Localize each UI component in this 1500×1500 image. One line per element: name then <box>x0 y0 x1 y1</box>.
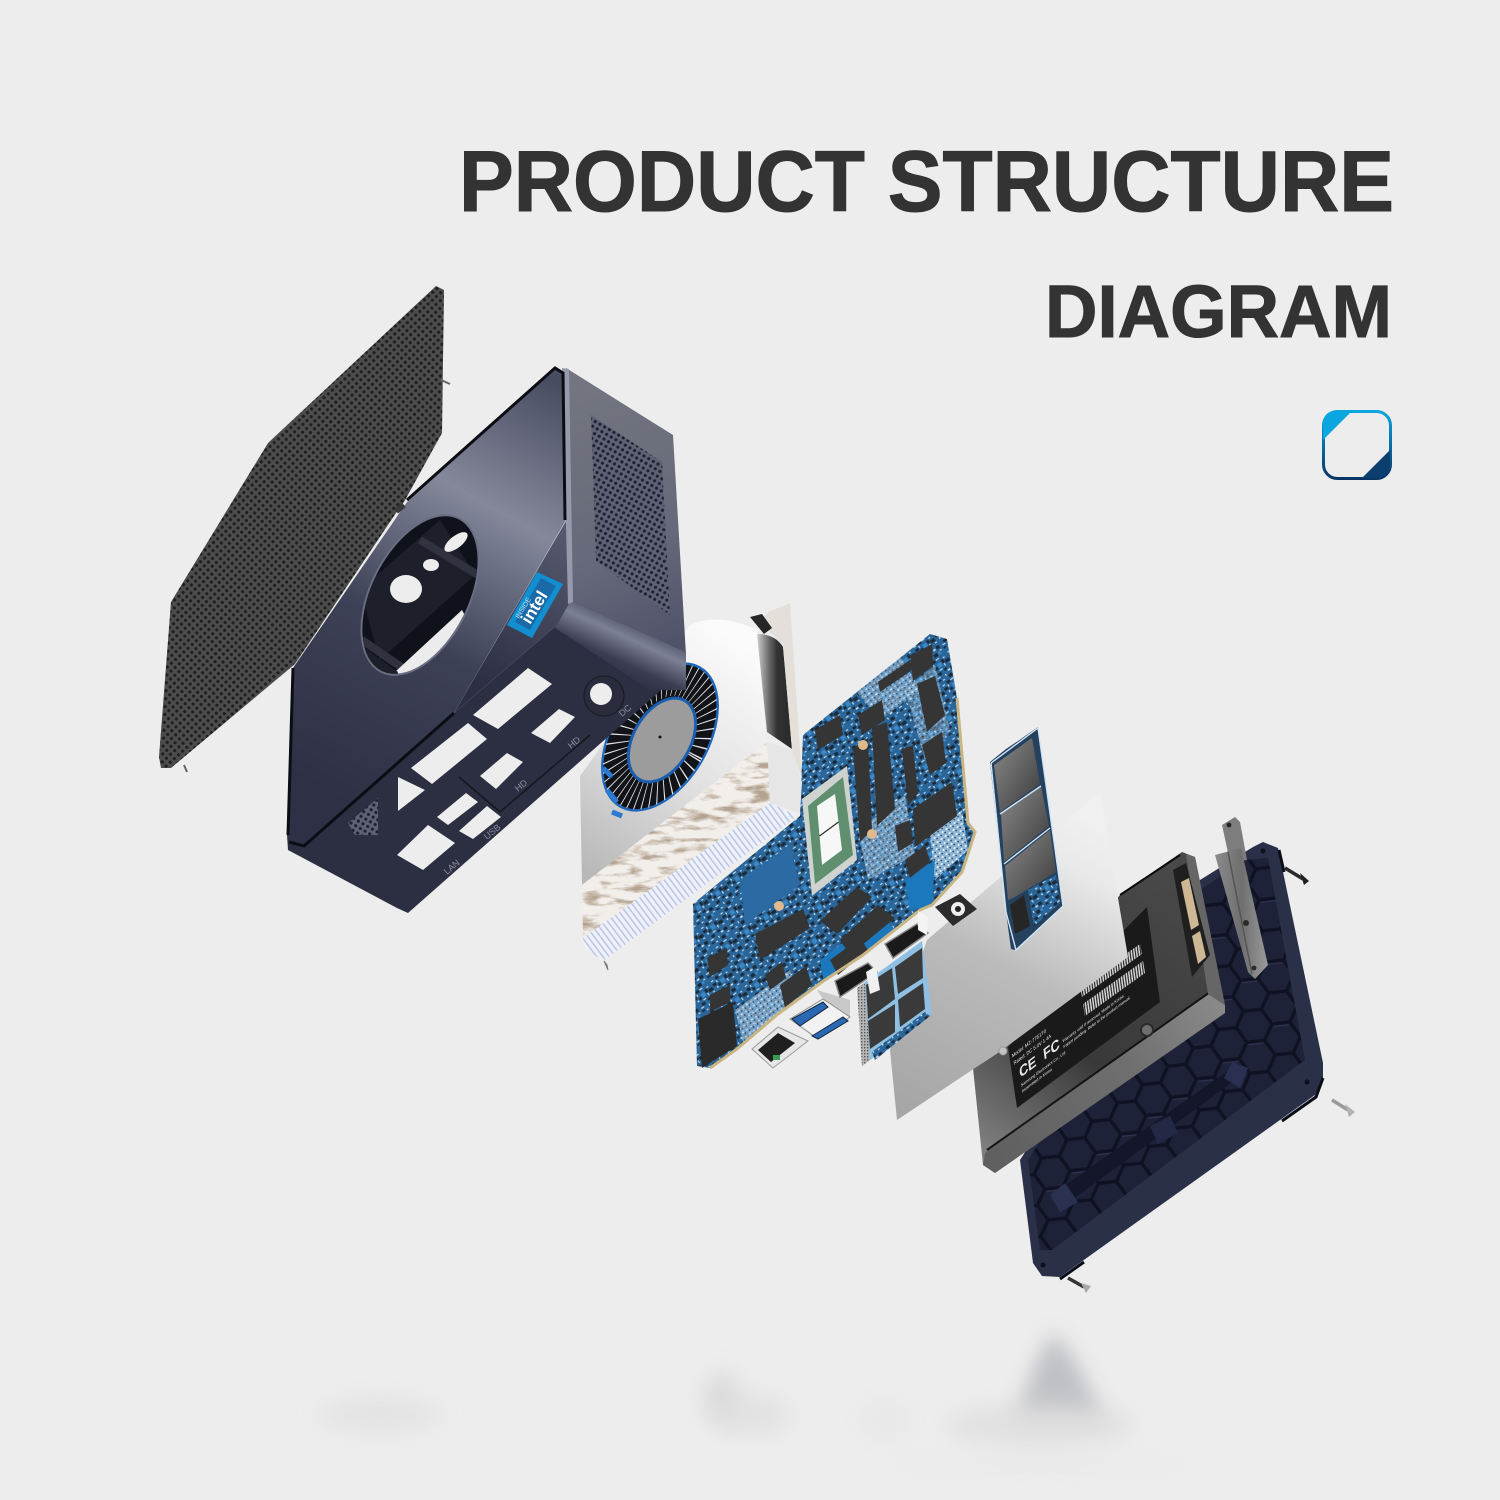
fan housing plate <box>580 620 767 885</box>
floor shadows <box>318 1332 1190 1474</box>
connector block <box>698 1002 737 1068</box>
ssd label: Patent pending. Refer to the product manual. <box>1063 994 1131 1050</box>
top plate <box>287 368 566 846</box>
dusty side strip <box>760 603 802 779</box>
rear vent <box>348 798 378 835</box>
title: product structure diagram: DIAGRAM <box>1045 270 1392 353</box>
ssd label: Rated: DC 5.0V 1.4A <box>1013 1033 1052 1067</box>
ssd label: Assembled in Korea <box>1021 1066 1053 1094</box>
perforated mesh panel <box>159 286 450 772</box>
front strip <box>454 521 570 713</box>
port cut-outs <box>397 668 575 870</box>
2.5-inch SATA SSD <box>973 852 1225 1173</box>
displayport opening 1 <box>473 668 552 729</box>
port labels: USB <box>482 822 502 842</box>
heat sink fins <box>583 803 797 961</box>
intel sticker: INSIDE <box>515 596 533 620</box>
icon: brand rounded square <box>1323 411 1390 478</box>
mounting bracket <box>1215 817 1268 979</box>
vent opening <box>398 777 425 811</box>
hdmi port 2 <box>835 963 877 997</box>
hdmi opening 1 <box>531 709 575 743</box>
screw bottom <box>1068 1278 1091 1293</box>
silver edge <box>562 368 573 604</box>
displayport opening 2 <box>411 723 487 784</box>
port labels: HD <box>513 777 530 794</box>
hdmi opening 2 <box>480 753 523 789</box>
port labels <box>442 702 634 877</box>
dc jack <box>866 894 977 994</box>
usb opening 1 <box>437 793 478 825</box>
dusty heat pipe face <box>582 742 770 938</box>
usb ports <box>790 990 850 1039</box>
clip <box>750 614 772 634</box>
m.2 ssd <box>990 727 1063 950</box>
hdmi port 1 <box>885 924 928 958</box>
dark duct strip <box>757 634 792 749</box>
title: product structure diagram <box>459 134 1394 353</box>
ssd label: FC <box>1042 1035 1061 1064</box>
fan hole <box>360 514 478 676</box>
board chips <box>707 644 957 1012</box>
intel sticker: intel <box>517 587 552 627</box>
title: product structure diagram: PRODUCT STRUCTURE <box>459 134 1394 230</box>
port labels: HD <box>566 734 583 751</box>
hd divider lines <box>459 735 590 812</box>
ethernet port <box>752 1027 808 1068</box>
screw top right <box>1285 868 1309 885</box>
ssd label: Model: MZ-77E1T0 <box>1012 1028 1047 1060</box>
lan opening <box>397 825 455 870</box>
cpu <box>802 766 857 896</box>
screw right <box>1332 1100 1355 1117</box>
m.2 wifi card <box>857 941 932 1066</box>
SATA connector <box>1173 863 1210 977</box>
dc jack opening <box>584 676 624 716</box>
motherboard <box>693 634 977 1068</box>
base plate with honeycomb ribs <box>1020 842 1323 1279</box>
cooling fan and heat sink <box>578 603 802 970</box>
main chassis <box>287 368 686 913</box>
ssd label <box>1008 907 1160 1108</box>
usb opening 2 <box>459 806 501 839</box>
port labels: DC <box>617 702 634 719</box>
ssd label: Warranty void if removed. Made in Korea. <box>1062 992 1125 1044</box>
thermal pad sheet <box>890 792 1128 1120</box>
port labels: LAN <box>442 858 462 877</box>
fan blades <box>578 644 742 830</box>
ssd label: CE <box>1018 1053 1037 1082</box>
white end block <box>767 742 802 813</box>
rear port face <box>287 600 686 913</box>
intel sticker <box>507 572 563 638</box>
chassis side with vents <box>566 368 686 655</box>
ssd label: Samsung Electronics Co., Ltd. <box>1021 1049 1066 1088</box>
